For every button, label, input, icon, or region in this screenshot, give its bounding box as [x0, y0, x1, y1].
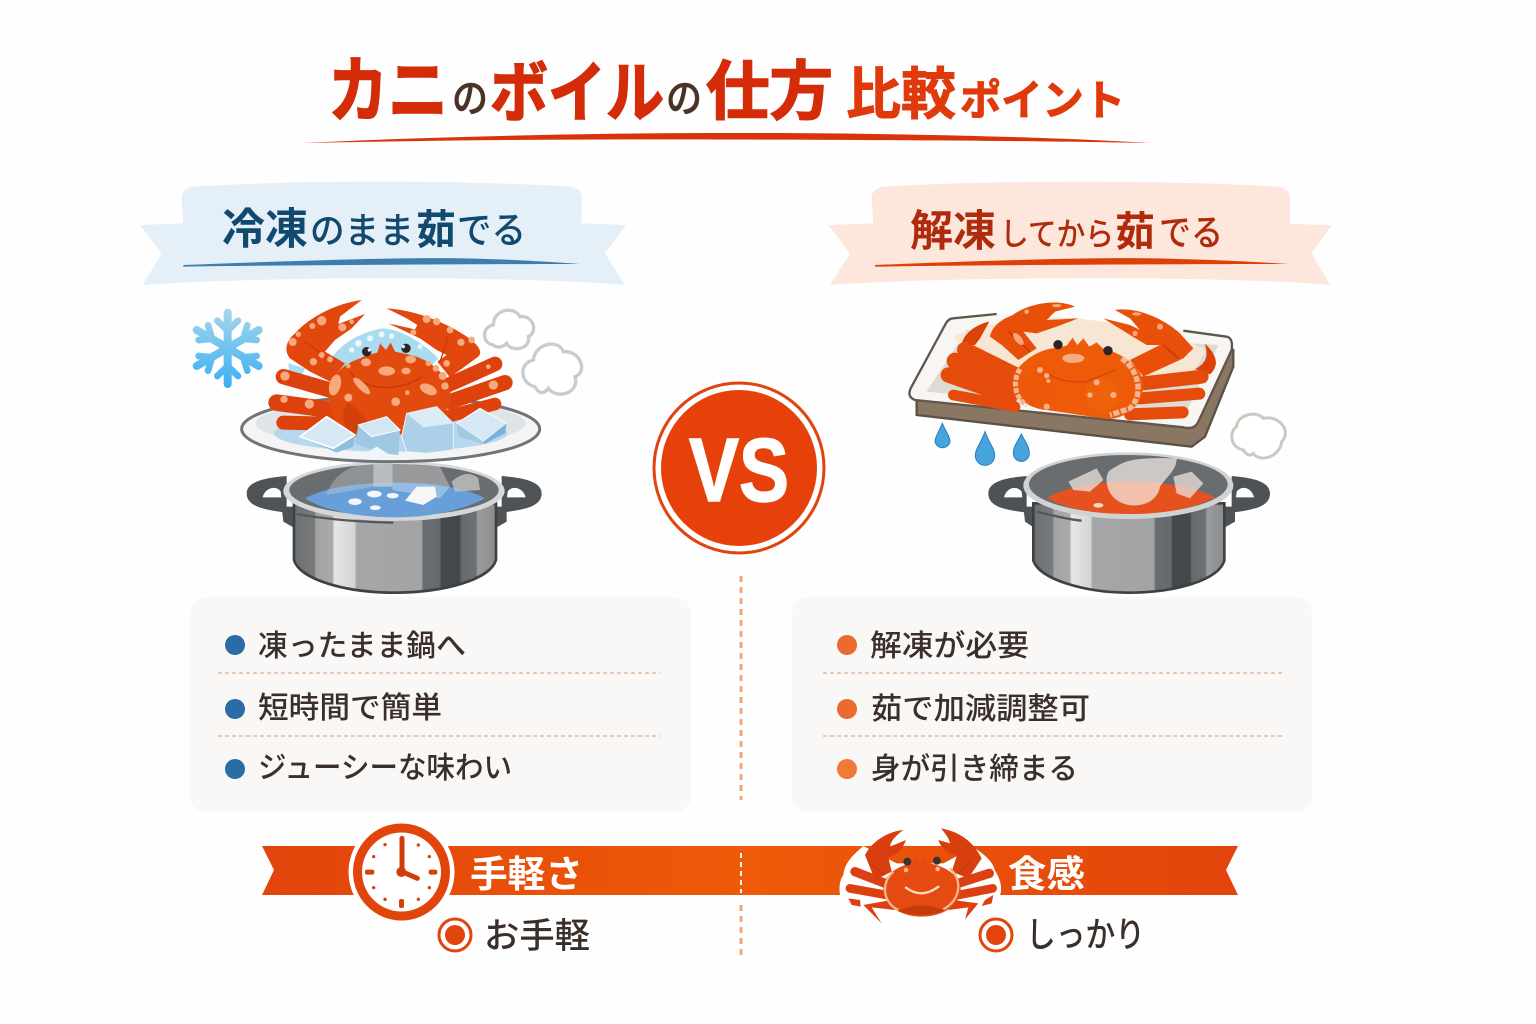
title: ポイント — [960, 67, 1125, 128]
icon: pot with orange broth — [988, 452, 1270, 593]
panel: left points — [190, 597, 691, 812]
icon: water drops — [935, 423, 1029, 465]
tray — [909, 314, 1233, 447]
right ribbon heading — [828, 182, 1332, 285]
title: 仕方 — [706, 41, 833, 133]
bullet item 2: 短時間で簡単 — [258, 683, 442, 727]
right ribbon heading: 茹 — [1115, 198, 1155, 258]
icon: steam clouds — [485, 310, 582, 394]
center dashed divider — [740, 576, 742, 800]
result: easy — [439, 908, 590, 959]
crab on tray — [948, 303, 1216, 419]
title: の — [452, 66, 488, 124]
right ribbon heading: でる — [1159, 204, 1223, 256]
VS badge — [654, 383, 824, 553]
bullet item 2: 茹で加減調整可 — [871, 684, 1090, 728]
VS badge: VS — [689, 421, 789, 521]
bullet item 1: 凍ったまま鍋へ — [258, 621, 466, 665]
title: カニ — [328, 32, 448, 137]
right ribbon heading: 解凍 — [910, 197, 996, 259]
label: texture: 食感 — [1008, 844, 1085, 898]
title underline — [303, 133, 1150, 143]
result: firm: しっかり — [1026, 907, 1145, 958]
icon: pot with boiling water — [247, 461, 542, 593]
left ribbon heading: 茹 — [416, 196, 456, 256]
illustration: thawed crab on tray over pot — [909, 303, 1285, 593]
ice cubes — [300, 407, 507, 459]
title — [328, 32, 1125, 137]
left ribbon heading: 冷凍 — [222, 195, 308, 257]
title: の — [666, 66, 702, 124]
plate — [242, 396, 540, 462]
title: 比較 — [846, 50, 956, 131]
bottom ribbon — [262, 844, 1238, 898]
icon: snowflake — [197, 313, 259, 384]
left ribbon heading — [140, 182, 626, 285]
right ribbon heading: してから — [1000, 209, 1114, 255]
bullet item 1: 解凍が必要 — [870, 621, 1029, 665]
title: ボイル — [490, 40, 664, 136]
bullet item 3: 身が引き締まる — [871, 744, 1078, 788]
illustration: frozen crab on plate over pot — [197, 300, 582, 593]
left ribbon heading: のまま — [310, 202, 414, 254]
left ribbon heading: でる — [457, 200, 526, 254]
bullet item 3: ジューシーな味わい — [258, 743, 512, 787]
label: ease: 手軽さ — [470, 844, 583, 898]
crab on ice — [277, 300, 505, 437]
panel: right points — [792, 597, 1312, 812]
icon: smiling crab — [840, 828, 1001, 927]
icon: steam cloud — [1232, 414, 1285, 458]
result: easy: お手軽 — [484, 908, 590, 959]
icon: clock — [348, 819, 454, 925]
result: firm — [980, 907, 1145, 958]
